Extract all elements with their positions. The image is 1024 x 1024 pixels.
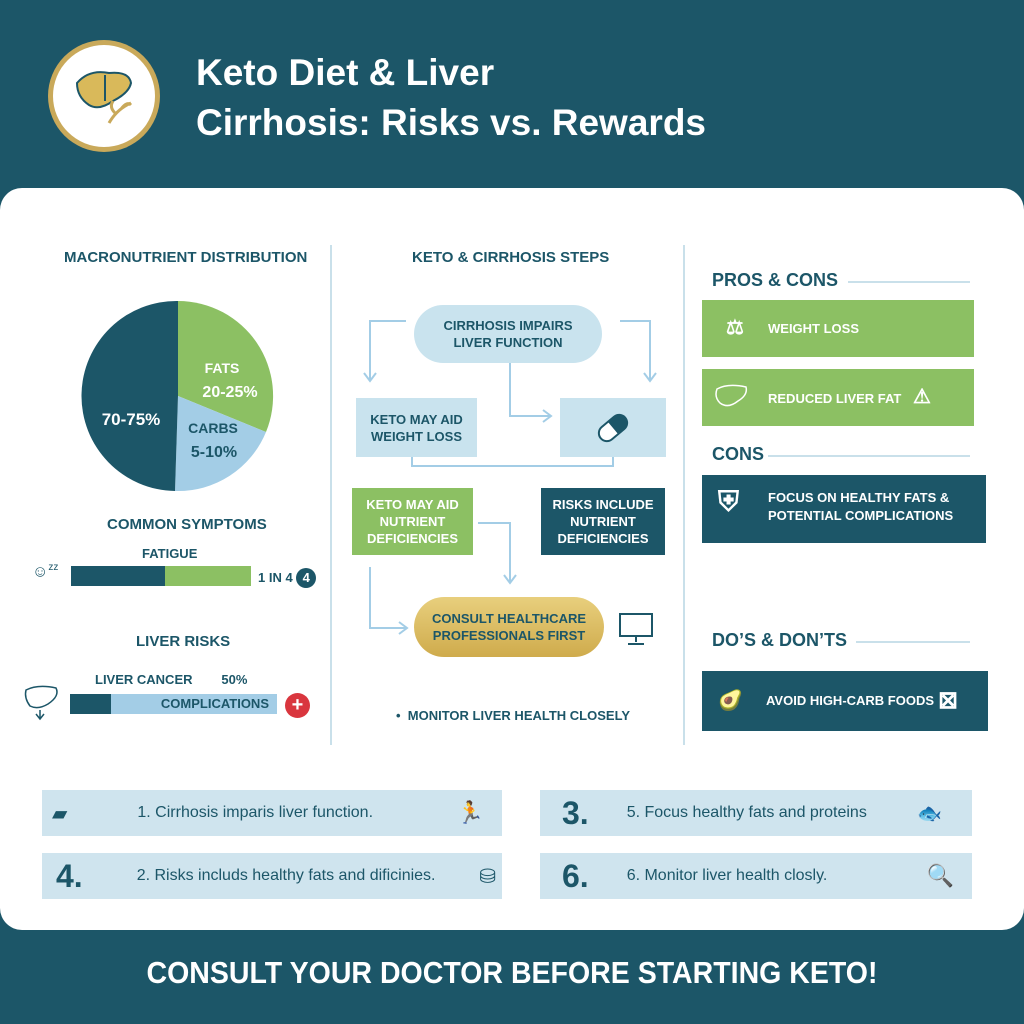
pro: weight loss: WEIGHT LOSS: [768, 321, 859, 336]
pro: weight loss: [702, 300, 974, 357]
con box: [702, 475, 986, 543]
step: pill icon: [560, 398, 666, 457]
pie chart: 70-75%: [102, 410, 160, 429]
label: FATIGUE: [142, 546, 197, 561]
value: [258, 568, 316, 588]
text: 6. Monitor liver health closly.: [627, 867, 827, 884]
step: green: DEFICIENCIES: [367, 531, 458, 546]
step: consult: CONSULT HEALTHCARE: [432, 611, 586, 626]
heading: do's: DO’S & DON’TS: [712, 630, 847, 650]
pie chart: 5-10%: [191, 444, 237, 461]
tip 4: 6.: [562, 858, 589, 894]
tip rows: 1. Cirrhosis imparis liver function.: [137, 804, 373, 821]
step: weight loss: WEIGHT LOSS: [371, 428, 462, 444]
panel: common symptoms: [32, 516, 316, 588]
tip 1: ▰: [52, 802, 67, 824]
text: ⛁: [479, 866, 496, 888]
main card: [0, 188, 1024, 930]
labels: LIVER CANCER 50%: [95, 672, 247, 687]
step: cirrhosis: LIVER FUNCTION: [453, 335, 563, 350]
pie chart: CARBS: [188, 420, 238, 436]
text: 2. Risks includs healthy fats and dificinies.: [137, 867, 436, 884]
pie chart: FATS: [205, 360, 239, 376]
value: 1 IN 4: [258, 570, 293, 585]
heading: MACRONUTRIENT DISTRIBUTION: [64, 249, 307, 266]
heading: LIVER RISKS: [136, 633, 230, 650]
tip 3: 3.: [562, 794, 589, 830]
footer banner: CONSULT YOUR DOCTOR BEFORE STARTING KETO!: [147, 955, 877, 990]
heading: pros: PROS & CONS: [712, 270, 838, 290]
con box: POTENTIAL COMPLICATIONS: [768, 508, 953, 523]
dont box: ⊠: [938, 687, 958, 714]
step: cirrhosis: [414, 305, 602, 363]
bar: [70, 694, 277, 714]
step: risks: RISKS INCLUDE: [552, 497, 654, 512]
tip rows: 🏃: [457, 800, 484, 825]
text: 5. Focus healthy fats and proteins: [627, 804, 867, 821]
pie chart: [82, 301, 274, 491]
icon: sleepy person: ☺zz: [32, 562, 58, 580]
step: consult: PROFESSIONALS FIRST: [433, 628, 585, 643]
con box: FOCUS ON HEALTHY FATS &: [768, 490, 949, 505]
bar: [71, 566, 251, 586]
header icon: [48, 40, 160, 152]
step: green: [352, 488, 473, 555]
icon: red cross: [285, 693, 310, 718]
step: risks: DEFICIENCIES: [557, 531, 648, 546]
icon: monitor: [619, 613, 653, 645]
note: • MONITOR LIVER HEALTH CLOSELY: [396, 708, 630, 723]
heading: KETO & CIRRHOSIS STEPS: [412, 249, 609, 266]
panel: steps: [352, 249, 666, 723]
heading: cons: CONS: [712, 444, 764, 464]
con box: ⛨: [718, 486, 739, 517]
title: Keto Diet & Liver: [196, 52, 494, 93]
pro: weight loss: ⚖: [726, 317, 744, 339]
tip 2: 4.: [56, 858, 83, 894]
step: consult: [414, 597, 604, 657]
step: risks: NUTRIENT: [570, 514, 636, 529]
step: green: KETO MAY AID: [366, 497, 459, 512]
heading: COMMON SYMPTOMS: [107, 516, 267, 533]
dont box: AVOID HIGH-CARB FOODS: [766, 693, 934, 708]
dont box: [702, 671, 988, 731]
text: 🔍: [927, 863, 954, 888]
panel: pros & cons: [702, 270, 988, 731]
icon: red cross: +: [292, 694, 303, 716]
icon: liver: [24, 686, 58, 720]
step: green: NUTRIENT: [380, 514, 445, 529]
tip rows: [42, 790, 502, 836]
step: risks: [541, 488, 665, 555]
dont box: 🥑: [718, 690, 743, 712]
pro: reduced liver fat: [702, 369, 974, 426]
arrows: [363, 320, 657, 635]
pie chart: 20-25%: [202, 384, 258, 401]
dividers: [330, 245, 332, 745]
panel: liver risks: [24, 633, 310, 720]
title: Cirrhosis: Risks vs. Rewards: [196, 102, 706, 143]
pro: reduced liver fat: REDUCED LIVER FAT ⚠: [768, 386, 931, 408]
value: 4: [303, 570, 310, 585]
step: weight loss: KETO MAY AID: [370, 412, 463, 426]
bar: COMPLICATIONS: [161, 696, 269, 711]
step: cirrhosis: CIRRHOSIS IMPAIRS: [443, 318, 573, 333]
step: weight loss: [356, 398, 477, 457]
title: [196, 52, 706, 143]
text: 🐟: [917, 802, 942, 824]
